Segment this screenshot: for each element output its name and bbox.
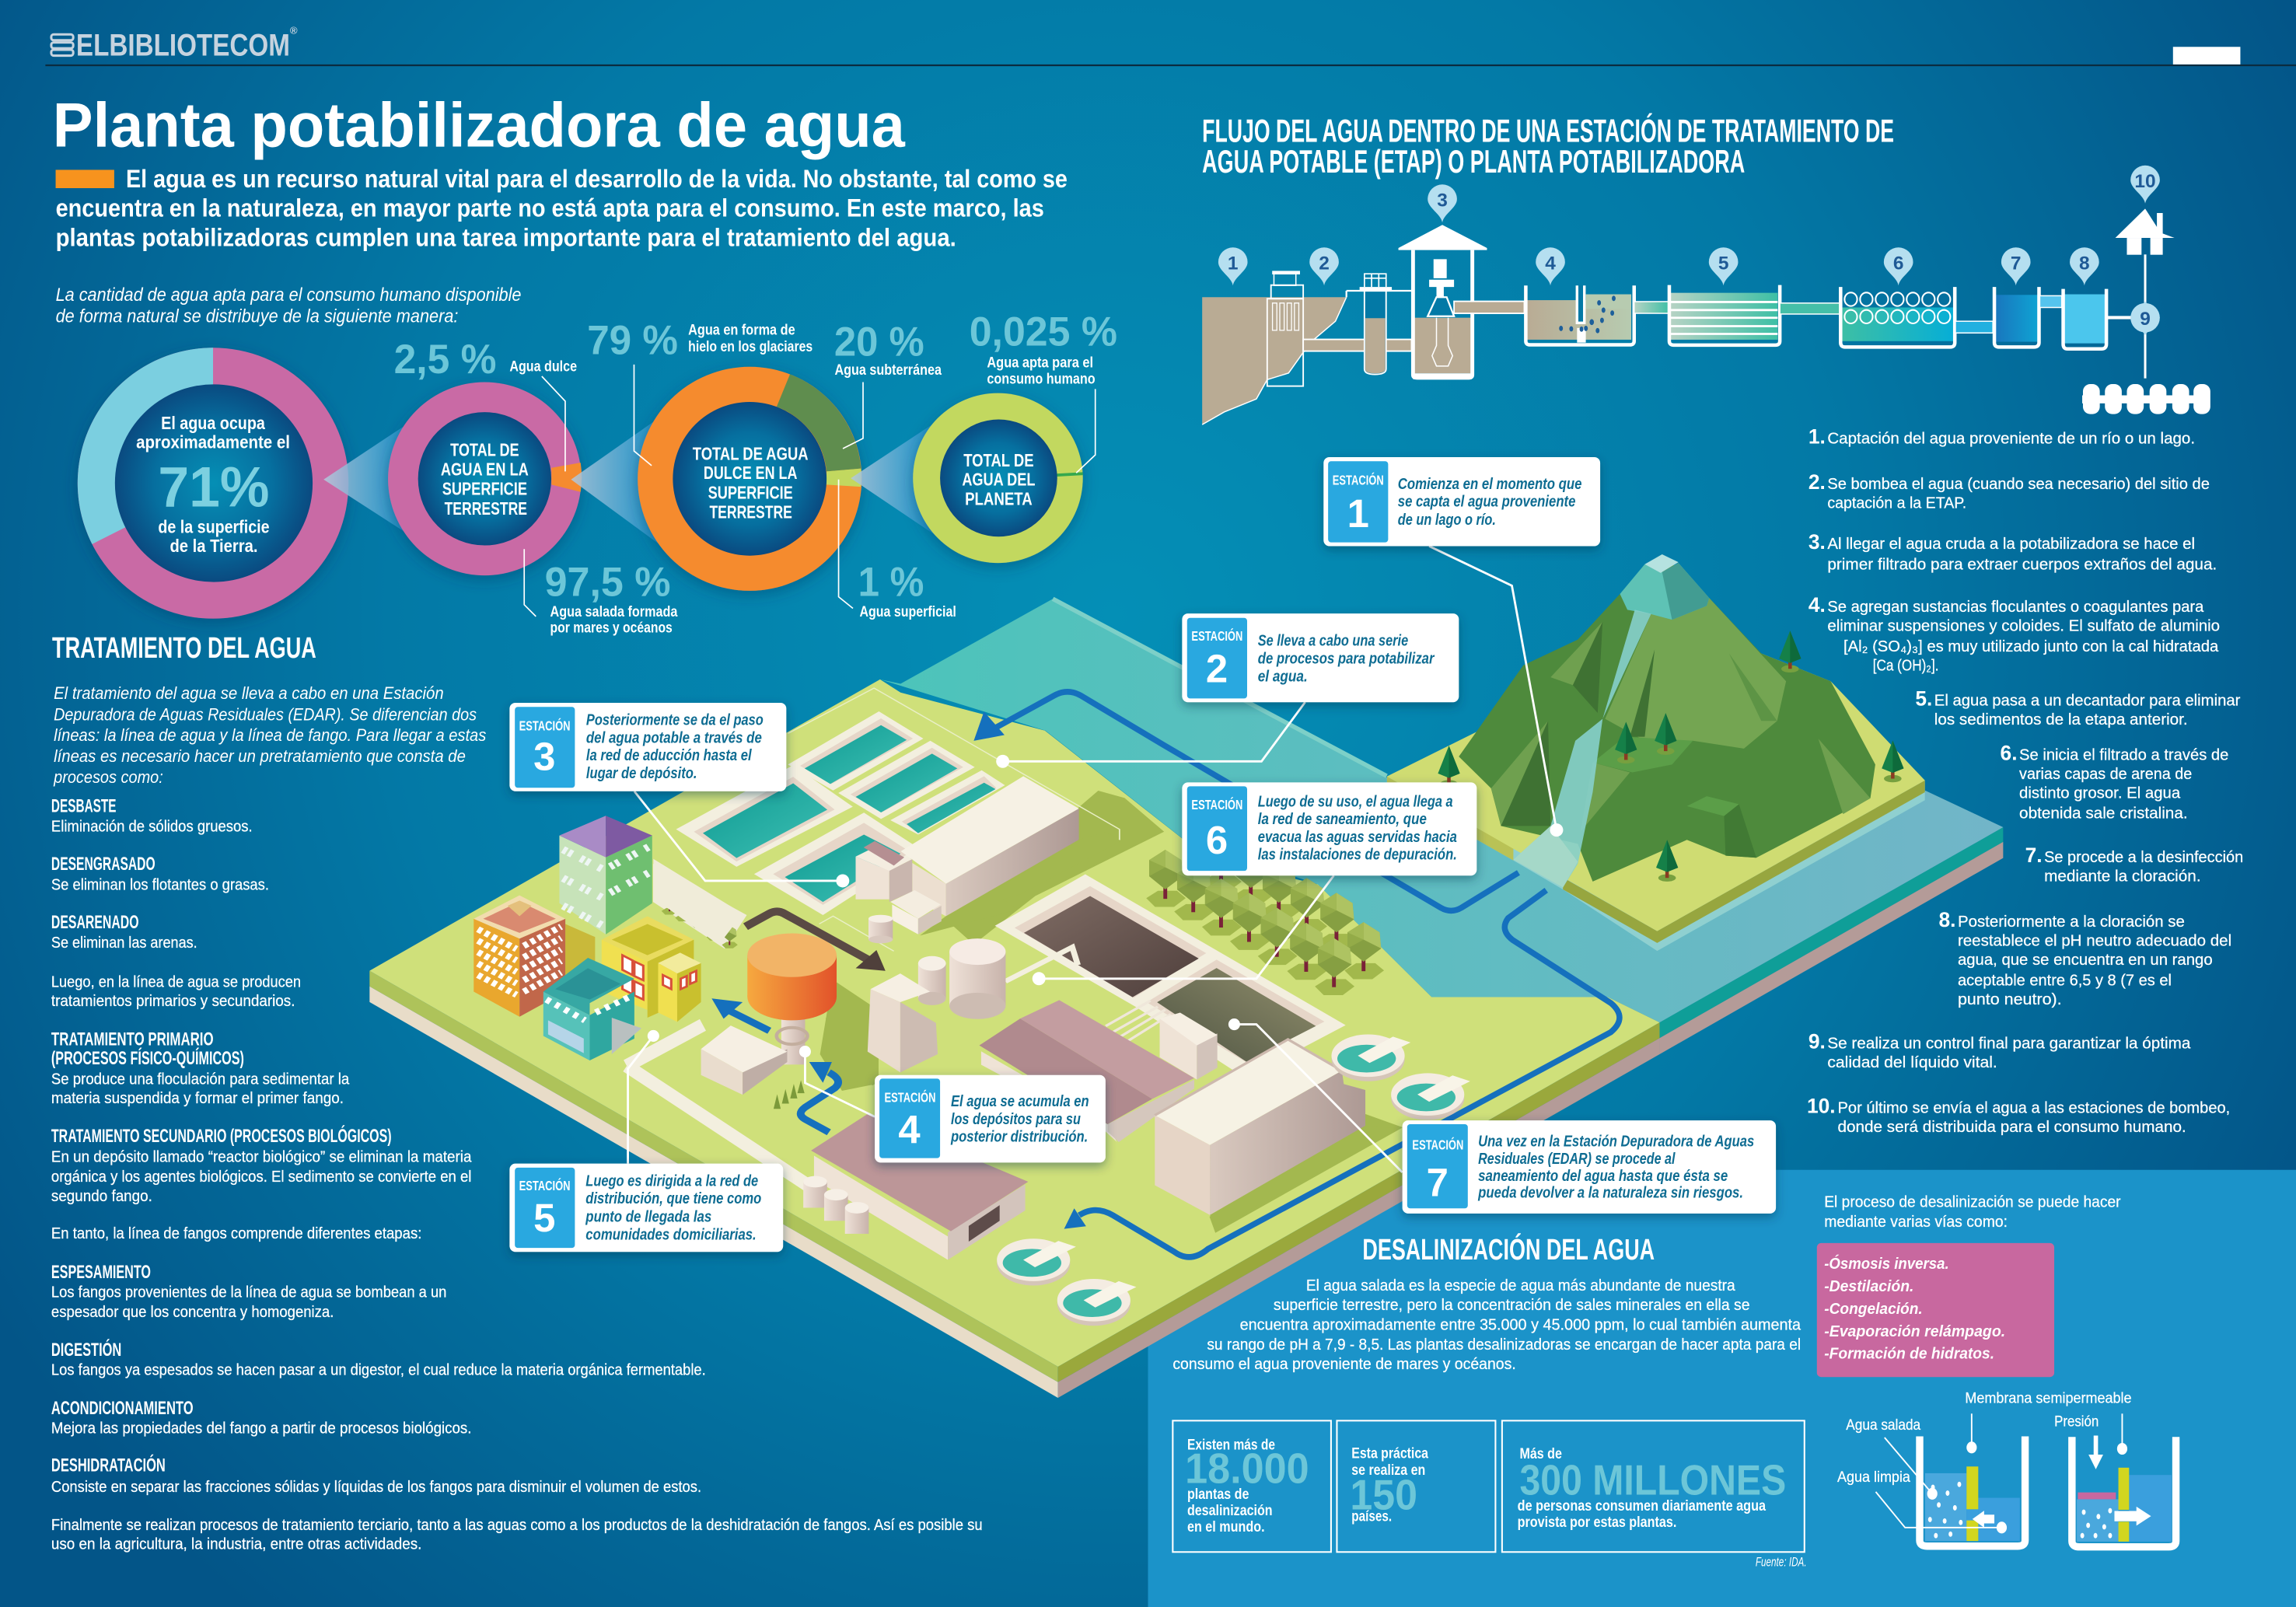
donut chart: total surface water: AGUA EN LA: [441, 459, 529, 479]
callout: station 7: [1403, 1120, 1776, 1214]
pins: 4: [1545, 253, 1556, 274]
percentage labels: Agua salada formada: [550, 603, 678, 620]
left column: water treatment: Se eliminan las arenas.: [51, 934, 197, 952]
callout: station 5: 5: [533, 1196, 555, 1240]
membrane diagram: Agua limpia: [1837, 1469, 1910, 1486]
numbered steps list: eliminar suspensiones y coloides. El sulfato de aluminio: [1827, 617, 2220, 635]
stat box: plants: [1172, 1420, 1331, 1552]
numbered steps list: 5.: [1915, 687, 1932, 711]
percentage labels: Agua dulce: [509, 358, 577, 375]
callout: station 7: Residuales (EDAR) se procede al: [1478, 1150, 1676, 1168]
numbered steps list: [Ca (OH)₂].: [1873, 657, 1938, 675]
left column: water treatment: Se produce una floculación para sedimentar la: [51, 1070, 350, 1088]
house and radiator: [2082, 208, 2210, 414]
callout: station 3: la red de aducción hasta el: [586, 746, 753, 764]
pins: 7: [2011, 253, 2022, 274]
numbered steps list: 2.: [1808, 470, 1826, 494]
left column: water treatment: Se eliminan los flotantes o grasas.: [51, 875, 269, 893]
callout: station 5: ESTACIÓN: [519, 1177, 571, 1193]
callout: station 3: lugar de depósito.: [586, 764, 697, 782]
flow arrow top: [973, 692, 1518, 910]
stat box: plants: Existen más de: [1187, 1436, 1275, 1453]
pins: 6: [1893, 253, 1903, 274]
heading: flow: FLUJO DEL AGUA DENTRO DE UNA ESTACIÓN DE TRATAMIENTO DE: [1202, 112, 1894, 148]
numbered steps list: captación a la ETAP.: [1827, 494, 1966, 512]
desalination methods: mediante varias vías como:: [1824, 1213, 2008, 1231]
numbered steps list: 8.: [1938, 908, 1955, 931]
numbered steps list: 7.: [2025, 844, 2043, 867]
left column: water treatment: DESBASTE: [51, 795, 117, 816]
percentage labels: 97,5 %: [545, 559, 671, 605]
left column: water treatment: [51, 631, 983, 1553]
shadow patches: [820, 791, 1403, 1233]
pins: 2: [1319, 253, 1330, 274]
tank 5: [1669, 285, 1840, 345]
stat box: people: provista por estas plantas.: [1518, 1514, 1676, 1531]
callout: station 5: comunidades domiciliarias.: [585, 1225, 757, 1243]
numbered steps list: Se realiza un control final para garantizar la óptima: [1827, 1034, 2191, 1052]
stat box: countries: Esta práctica: [1351, 1445, 1429, 1462]
cone 2: [571, 416, 662, 546]
desalination: paragraph: superficie terrestre, pero la concentración de sales minerales en ella se: [1274, 1296, 1750, 1314]
callout: station 5: distribución, que tiene como: [585, 1190, 761, 1207]
left column: water treatment: materia suspendida y formar el primer fango.: [51, 1089, 344, 1107]
callout: station 2: Se lleva a cabo una serie: [1258, 631, 1408, 649]
donut chart: total surface water: TOTAL DE: [450, 440, 519, 460]
land with intake: [1202, 271, 1347, 424]
desalination: paragraph: encuentra aproximadamente entre 35.000 y 45.000 ppm, lo cual también aumenta: [1240, 1316, 1802, 1334]
numbered steps list: Al llegar el agua cruda a la potabilizadora se hace el: [1827, 535, 2195, 553]
donut chart: surface of the Earth: El agua ocupa: [161, 413, 266, 433]
numbered steps list: Se inicia el filtrado a través de: [2019, 746, 2228, 763]
numbered steps list: Captación del agua proveniente de un río o un lago.: [1827, 430, 2195, 448]
numbered steps list: 4.: [1808, 593, 1826, 617]
left column: water treatment: segundo fango.: [51, 1187, 152, 1205]
stat box: countries: [1337, 1420, 1495, 1552]
left column: water treatment: líneas: la línea de agua y la línea de fango. Para llegar a estas: [54, 725, 486, 745]
numbered steps list: Se procede a la desinfección: [2044, 848, 2243, 866]
tank 8: [2064, 289, 2132, 349]
numbered steps list: 10.: [1807, 1094, 1836, 1117]
mountain island: [1387, 554, 1925, 951]
callout: station 7: ESTACIÓN: [1412, 1136, 1463, 1152]
left column: water treatment: líneas es necesario hacer un pretratamiento que consta de: [54, 746, 466, 766]
left column: water treatment: DESHIDRATACIÓN: [51, 1455, 166, 1476]
stat box: countries: se realiza en: [1351, 1462, 1425, 1479]
left column: water treatment: (PROCESOS FÍSICO-QUÍMICOS): [51, 1047, 244, 1069]
dark arrow: [746, 911, 886, 971]
pipe and well: [1303, 274, 1411, 375]
callout: station 6: [1182, 782, 1476, 875]
donut chart: total planet water: [913, 393, 1083, 563]
callout: station 7: saneamiento del agua hasta que ésta se: [1478, 1167, 1728, 1185]
callout: station 4: [875, 1075, 1106, 1162]
path: [627, 1025, 820, 1193]
callout: station 4: los depósitos para su: [951, 1110, 1081, 1128]
platform sides: [369, 827, 2003, 1398]
numbered steps list: 9.: [1808, 1029, 1826, 1053]
desalination methods: [1817, 1193, 2121, 1377]
numbered steps list: Por último se envía el agua a las estaciones de bombeo,: [1838, 1099, 2230, 1116]
donut chart: surface of the Earth: de la superficie: [158, 517, 270, 537]
desalination: paragraph: [1172, 1277, 1802, 1373]
tank 4: [1525, 285, 1669, 345]
callout: station 3: 3: [533, 735, 555, 779]
numbered steps list: varias capas de arena de: [2019, 765, 2192, 783]
callout: station 6: ESTACIÓN: [1191, 796, 1242, 812]
left column: water treatment: DESARENADO: [51, 912, 139, 933]
heading: flow: [1202, 112, 1894, 180]
numbered steps list: primer filtrado para extraer cuerpos extraños del agua.: [1827, 556, 2217, 574]
callout: station 2: de procesos para potabilizar: [1258, 649, 1435, 667]
distribution intro: de forma natural se distribuye de la siguiente manera:: [56, 306, 458, 327]
leader lines: [628, 546, 1563, 1172]
numbered steps list: 6.: [2001, 741, 2018, 764]
title: Planta potabilizadora de agua: [53, 90, 906, 160]
callout: station 6: evacua las aguas servidas hacia: [1258, 828, 1457, 846]
cone 1: [323, 423, 408, 534]
intro paragraph: [56, 165, 1068, 251]
logo: ®: [290, 24, 298, 36]
distribution intro: La cantidad de agua apta para el consumo humano disponible: [56, 285, 521, 306]
callout: station 4: ESTACIÓN: [885, 1089, 935, 1106]
numbered steps list: donde será distribuida para el consumo humano.: [1838, 1118, 2186, 1136]
callout: station 2: ESTACIÓN: [1191, 627, 1242, 644]
percentage labels: 79 %: [587, 318, 678, 364]
olive block: [565, 924, 595, 987]
desalination: paragraph: El agua salada es la especie de agua más abundante de nuestra: [1306, 1277, 1735, 1294]
orange building: [474, 896, 565, 1017]
left column: water treatment: procesos como:: [53, 767, 163, 787]
left column: water treatment: En un depósito llamado “reactor biológico” se eliminan la materia: [51, 1148, 472, 1165]
beaker left: [1875, 1413, 2025, 1546]
stat box: people: 300 MILLONES: [1519, 1456, 1786, 1504]
stat box: people: [1502, 1420, 1805, 1552]
donut chart: fresh water: TOTAL DE AGUA: [693, 443, 809, 463]
callout: station 1: se capta el agua proveniente: [1398, 493, 1575, 511]
callout: station 5: [509, 1164, 783, 1252]
desalination: heading: DESALINIZACIÓN DEL AGUA: [1362, 1233, 1655, 1266]
callout: station 6: la red de saneamiento, que: [1258, 810, 1427, 828]
left column: water treatment: Mejora las propiedades del fango a partir de procesos biológicos.: [51, 1420, 471, 1438]
source: Fuente: IDA.: [1756, 1554, 1807, 1569]
percentage labels: Agua apta para el: [987, 355, 1093, 372]
settling tanks and plant: [980, 875, 1400, 1227]
left column: water treatment: TRATAMIENTO DEL AGUA: [52, 631, 316, 664]
membrane diagram: Membrana semipermeable: [1965, 1390, 2132, 1407]
numbered steps list: El agua pasa a un decantador para eliminar: [1934, 692, 2241, 710]
intro paragraph: plantas potabilizadoras cumplen una tarea importante para el tratamiento del agua.: [56, 223, 956, 251]
pins: 3: [1437, 190, 1448, 211]
donut chart: total surface water: TERRESTRE: [445, 498, 527, 519]
callout: station 7: 7: [1427, 1161, 1449, 1205]
callout: station 5: Luego es dirigida a la red de: [585, 1172, 758, 1190]
stat box: people: de personas consumen diariamente agua: [1518, 1497, 1767, 1514]
membrane diagram: [1837, 1390, 2176, 1547]
numbered steps list: los sedimentos de la etapa anterior.: [1934, 711, 2188, 728]
numbered steps list: Se agregan sustancias floculantes o coagulantes para: [1827, 598, 2204, 616]
heading: flow: AGUA POTABLE (ETAP) O PLANTA POTABILIZADORA: [1202, 143, 1745, 180]
callout: station 3: ESTACIÓN: [519, 717, 571, 733]
percentage labels: consumo humano: [987, 370, 1096, 387]
left column: water treatment: Finalmente se realizan procesos de tratamiento terciario, tanto a las aguas como a los productos de la deshidratación de fangos. Así es posible su: [51, 1516, 983, 1534]
percentage labels: [394, 309, 1117, 637]
pins: 10: [2134, 171, 2156, 192]
callout: station 3: del agua potable a través de: [586, 728, 762, 746]
callout: station 2: 2: [1206, 647, 1228, 691]
percentage labels: 2,5 %: [394, 337, 496, 383]
desalination methods: El proceso de desalinización se puede hacer: [1824, 1193, 2121, 1210]
numbered steps list: calidad del líquido vital.: [1827, 1053, 1997, 1071]
silos: [918, 938, 1005, 1019]
desalination methods: -Formación de hidratos.: [1824, 1345, 1994, 1363]
percentage labels: Agua superficial: [859, 603, 956, 620]
pools: [676, 765, 922, 915]
small blue arrows: [711, 998, 838, 1132]
callout: station 5: punto de llegada las: [585, 1208, 711, 1226]
panel: desalination background: [1148, 1170, 2296, 1607]
water tower: [747, 934, 837, 1064]
callout: station 2: el agua.: [1258, 667, 1308, 685]
pump house: [1399, 225, 1525, 379]
left column: water treatment: Eliminación de sólidos gruesos.: [51, 817, 253, 835]
callout: station 6: 6: [1206, 818, 1228, 862]
numbered steps list: punto neutro).: [1958, 990, 2062, 1008]
numbered steps list: mediante la cloración.: [2044, 868, 2201, 886]
desalination: paragraph: consumo el agua proveniente de mares y océanos.: [1172, 1355, 1516, 1373]
numbered steps list: [Al₂ (SO₄)₃] es muy utilizado junto con la cal hidratada: [1843, 638, 2219, 655]
left column: water treatment: Los fangos provenientes de la línea de agua se bombean a un: [51, 1284, 446, 1301]
left column: water treatment: espesador que los concentra y homogeniza.: [51, 1303, 334, 1321]
left column: water treatment: orgánica y los agentes biológicos. El sedimento se convierte en el: [51, 1168, 471, 1186]
numbered steps list: obtenida sale cristalina.: [2019, 805, 2188, 823]
callout: station 3: Posteriormente se da el paso: [586, 711, 764, 729]
intro paragraph: El agua es un recurso natural vital para el desarrollo de la vida. No obstante, tal como se: [126, 165, 1068, 193]
desalination methods: -Destilación.: [1824, 1277, 1913, 1295]
percentage labels: 0,025 %: [970, 309, 1117, 355]
left column: water treatment: ESPESAMIENTO: [51, 1262, 151, 1283]
donut chart: surface of the Earth: aproximadamente el: [136, 431, 290, 452]
green tower: [559, 816, 652, 935]
percentage labels: hielo en los glaciares: [688, 338, 813, 355]
pins: 1: [1228, 253, 1239, 274]
donut chart: surface of the Earth: 71%: [158, 456, 270, 519]
numbered steps list: agua, que se encuentra en un rango: [1958, 951, 2213, 969]
left column: water treatment: TRATAMIENTO PRIMARIO: [51, 1029, 214, 1050]
callout: station 2: [1182, 613, 1459, 702]
desalination methods: -Evaporación relámpago.: [1824, 1322, 2005, 1340]
callout: station 7: pueda devolver a la naturaleza sin riesgos.: [1477, 1184, 1743, 1202]
pins: 9: [2140, 309, 2151, 330]
left column: water treatment: En tanto, la línea de fangos comprende diferentes etapas:: [51, 1224, 421, 1242]
callout: station 4: El agua se acumula en: [951, 1092, 1089, 1110]
numbered steps list: Posteriormente a la cloración se: [1958, 913, 2185, 931]
numbered steps list: Se bombea el agua (cuando sea necesario) del sitio de: [1827, 475, 2210, 493]
left column: water treatment: TRATAMIENTO SECUNDARIO (PROCESOS BIOLÓGICOS): [51, 1125, 392, 1147]
left column: water treatment: DESENGRASADO: [51, 854, 156, 875]
distribution intro: [56, 285, 521, 327]
left column: water treatment: uso en la agricultura, la industria, entre otras actividades.: [51, 1535, 421, 1553]
pins: [1218, 166, 2160, 335]
callout: station 6: Luego de su uso, el agua llega a: [1258, 793, 1453, 811]
donut chart: fresh water: [638, 367, 861, 591]
numbered steps list: distinto grosor. El agua: [2019, 784, 2181, 802]
desalination methods: -Congelación.: [1824, 1300, 1923, 1318]
isometric platform: [369, 554, 2003, 1398]
pump block: [868, 973, 938, 1072]
stat box: plants: 18.000: [1185, 1445, 1309, 1493]
donut chart: fresh water: SUPERFICIE: [708, 483, 793, 503]
numbered steps list: reestablece el pH neutro adecuado del: [1958, 932, 2231, 950]
stat box: plants: desalinización: [1187, 1502, 1273, 1519]
left column: water treatment: Los fangos ya espesados se hacen pasar a un digestor, el cual reduce la materia orgánica fermentable.: [51, 1361, 706, 1378]
percentage labels: 20 %: [834, 320, 924, 365]
shrubs: [662, 891, 738, 948]
left column: water treatment: Consiste en separar las fracciones sólidas y líquidas de los fangos para disminuir el volumen de estos.: [51, 1478, 701, 1496]
left column: water treatment: Luego, en la línea de agua se producen: [51, 973, 301, 990]
left column: water treatment: Depuradora de Aguas Residuales (EDAR). Se diferencian dos: [54, 704, 477, 724]
callout: station 7: Una vez en la Estación Depuradora de Aguas: [1478, 1133, 1754, 1151]
teal building: [543, 958, 641, 1060]
callout: station 1: Comienza en el momento que: [1398, 475, 1582, 493]
donut chart: fresh water: DULCE EN LA: [704, 463, 797, 483]
callout: station 4: 4: [898, 1107, 921, 1151]
callout: station 3: [509, 703, 786, 791]
callout: station 6: las instalaciones de depuración.: [1258, 845, 1457, 863]
cone 3: [851, 423, 935, 534]
left column: water treatment: tratamientos primarios y secundarios.: [51, 992, 295, 1010]
percentage labels: Agua en forma de: [688, 322, 795, 339]
callout: station 1: 1: [1347, 491, 1369, 536]
diagram: treatment flow: [1202, 166, 2210, 424]
donut chart: total surface water: [388, 383, 582, 575]
river pipe with arrow: [1064, 890, 1620, 1257]
left column: water treatment: ACONDICIONAMIENTO: [51, 1398, 194, 1419]
stat box: people: Más de: [1519, 1445, 1562, 1462]
pines: [1438, 631, 1903, 882]
percentage labels: 1 %: [858, 559, 924, 605]
top right white tab: [2173, 47, 2240, 65]
numbered steps list: 3.: [1808, 530, 1826, 554]
callout: station 1: de un lago o río.: [1398, 511, 1496, 529]
percentage labels: por mares y océanos: [550, 620, 673, 637]
donut chart: surface of the Earth: de la Tierra.: [169, 536, 257, 556]
clarifiers: [997, 1035, 1470, 1326]
pins: 8: [2079, 253, 2090, 274]
tank 6: [1840, 287, 1993, 347]
tank 7: [1994, 287, 2062, 347]
left column: water treatment: DIGESTIÓN: [51, 1339, 121, 1361]
intro paragraph: encuentra en la naturaleza, en mayor parte no está apta para el consumo. En este marco, las: [56, 194, 1044, 222]
donut chart: total planet water: PLANETA: [965, 489, 1033, 509]
low building: [701, 1025, 788, 1095]
stat box: countries: 150: [1350, 1471, 1417, 1518]
numbered steps list: 1.: [1808, 425, 1826, 449]
left column: water treatment: El tratamiento del agua se lleva a cabo en una Estación: [54, 683, 444, 703]
left buildings and central scene: [474, 816, 1028, 1259]
pins: 5: [1718, 253, 1728, 274]
stat box: plants: en el mundo.: [1187, 1518, 1265, 1535]
donut chart: total planet water: TOTAL DE: [963, 450, 1034, 470]
beaker right: [2072, 1413, 2176, 1547]
desalination: paragraph: su rango de pH a 7,9 - 8,5. Las plantas desalinizadoras se encargan de hacer apta para el: [1207, 1336, 1801, 1354]
logo: ELBIBLIOTECOM: [76, 29, 290, 63]
donut chart: surface of the Earth: [78, 348, 348, 619]
percentage labels: Agua subterránea: [834, 362, 942, 379]
membrane diagram: Presión: [2054, 1413, 2099, 1430]
donut chart: total planet water: AGUA DEL: [962, 470, 1035, 490]
yellow building: [602, 916, 701, 1022]
donut chart: fresh water: TERRESTRE: [709, 502, 792, 522]
desalination methods: -Ósmosis inversa.: [1824, 1254, 1949, 1273]
tree cluster: [1146, 833, 1384, 995]
numbered steps list: aceptable entre 6,5 y 8 (7 es el: [1958, 971, 2172, 989]
donut chart: total surface water: SUPERFICIE: [442, 479, 527, 499]
small pines: [774, 1080, 805, 1109]
callout: station 1: [1323, 457, 1600, 546]
membrane diagram: Agua salada: [1846, 1417, 1920, 1434]
stat box: plants: plantas de: [1187, 1486, 1249, 1503]
callout: station 1: ESTACIÓN: [1333, 471, 1384, 487]
stat box: countries: países.: [1351, 1508, 1392, 1525]
lower hall: [803, 1114, 1028, 1259]
water surface: [880, 599, 2003, 1022]
numbered steps list: [1807, 425, 2243, 1136]
callout: station 4: posterior distribución.: [950, 1128, 1088, 1146]
main land: [369, 679, 1660, 1367]
